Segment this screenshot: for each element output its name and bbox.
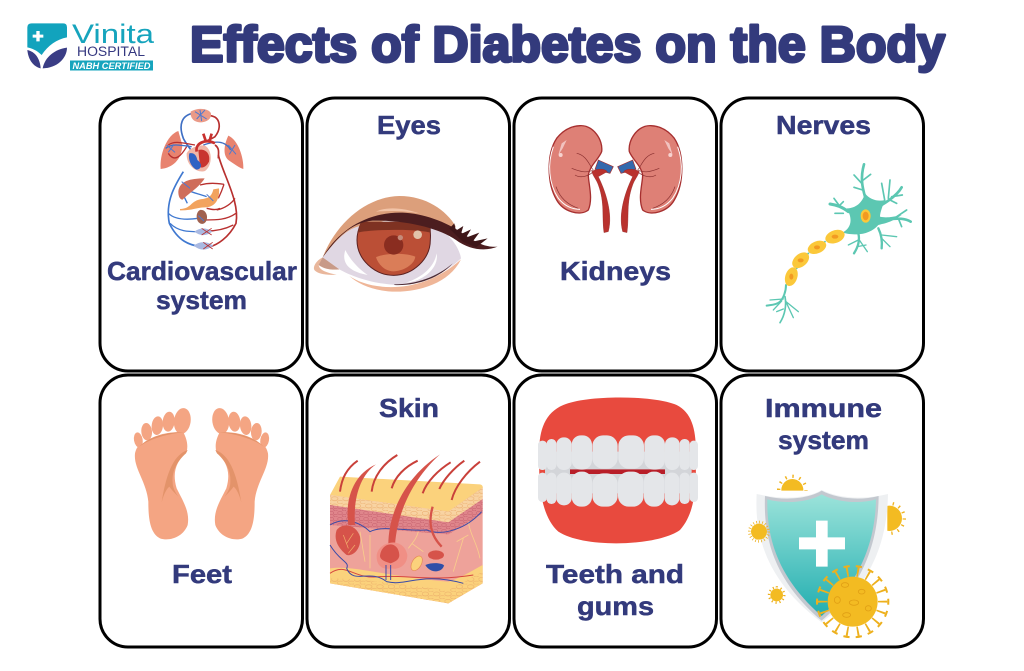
logo certification badge: NABH CERTIFIED	[72, 61, 151, 72]
panel: eyes	[307, 98, 510, 371]
label: Teeth and	[546, 559, 684, 589]
panel: immune system	[721, 375, 924, 647]
label: Eyes	[377, 110, 441, 140]
panel: cardiovascular system	[100, 98, 302, 371]
label: Kidneys	[560, 256, 671, 286]
icon: shield and viruses	[749, 476, 904, 637]
label: Cardiovascular	[107, 256, 297, 286]
panel: skin	[307, 375, 510, 647]
label: Feet	[172, 559, 232, 589]
logo name: Vinita	[72, 19, 155, 49]
icon: neuron	[767, 164, 911, 323]
label: system	[156, 285, 247, 315]
logo: Vinita Hospital	[27, 19, 155, 72]
icon: kidneys	[549, 126, 682, 233]
panel: kidneys	[514, 98, 716, 371]
panel: feet	[100, 375, 302, 647]
icon: eye	[314, 196, 498, 292]
panel: nerves	[721, 98, 924, 371]
title: Effects of Diabetes on the Body	[190, 16, 945, 72]
label: Skin	[379, 393, 439, 423]
label: Nerves	[776, 110, 871, 140]
label: system	[778, 425, 869, 455]
label: gums	[577, 591, 654, 621]
icon: logo shield	[27, 23, 67, 68]
logo subtitle: HOSPITAL	[77, 44, 145, 59]
panel: teeth and gums	[514, 375, 716, 647]
label: Immune	[765, 393, 882, 423]
icon: teeth and gums	[538, 397, 698, 543]
icon: feet	[133, 407, 270, 539]
icon: circulatory system	[161, 109, 243, 250]
icon: skin layers	[330, 454, 483, 603]
